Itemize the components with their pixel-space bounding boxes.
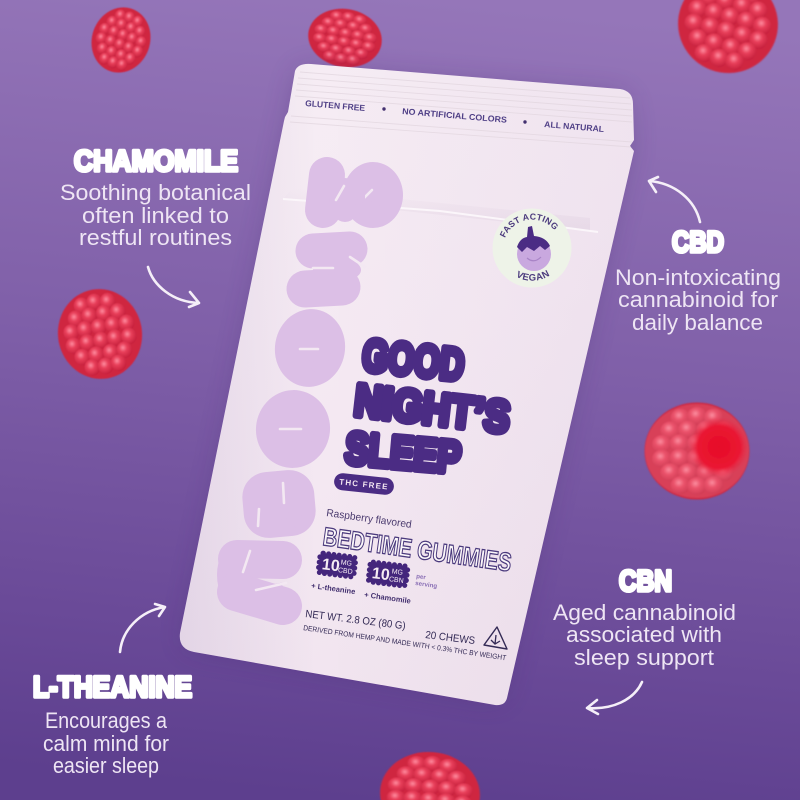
Chamomile: + Chamomile xyxy=(364,590,411,606)
dose badge: CBD: 10 xyxy=(321,556,341,575)
letter o: o xyxy=(281,426,334,461)
icon: raspberry xyxy=(517,226,551,271)
callout: l-theanine xyxy=(33,671,192,778)
letter z xyxy=(240,468,318,540)
callout: cbd: daily balance xyxy=(632,310,763,335)
top band claims: GLUTEN FREE xyxy=(305,98,366,113)
letter y: y xyxy=(246,576,299,609)
dose badge: CBN xyxy=(368,562,408,586)
letter y xyxy=(217,543,299,609)
callout: l-theanine: easier sleep xyxy=(53,753,159,778)
letter S xyxy=(323,162,403,228)
callout: chamomile: often linked to xyxy=(82,203,229,228)
heading: good night's sleep: GOOD xyxy=(360,329,467,391)
pill: thc free xyxy=(333,472,395,496)
callout: chamomile: CHAMOMILE xyxy=(74,145,238,178)
heading: good night's sleep: NIGHT’S xyxy=(352,374,513,443)
callout: cbd: CBD xyxy=(672,226,724,259)
crimped top band xyxy=(290,72,632,147)
callout: chamomile xyxy=(60,145,251,250)
product name: BEDTIME GUMMIES xyxy=(321,521,513,577)
letter o xyxy=(269,304,351,392)
pouch body xyxy=(180,64,634,705)
callout: l-theanine: Encourages a xyxy=(45,708,167,733)
dose badge: CBN: MG xyxy=(391,568,403,577)
Snoozy logo xyxy=(217,162,403,609)
pouch shadow xyxy=(185,70,630,700)
badge: fast acting vegan: VEGAN xyxy=(518,270,550,281)
badge: fast acting vegan xyxy=(492,208,572,288)
raspberry: top left xyxy=(82,0,160,81)
dose badge: CBN: 10 xyxy=(371,565,391,584)
top band claims: ALL NATURAL xyxy=(544,119,604,134)
net weight: NET WT. 2.8 OZ (80 G) xyxy=(305,608,406,632)
callout: cbn: sleep support xyxy=(574,645,715,670)
top band claims: NO ARTIFICIAL COLORS xyxy=(402,106,508,125)
raspberry: right with hollow xyxy=(644,402,750,500)
pouch xyxy=(180,64,634,706)
derivation note: DERIVED FROM HEMP AND MADE WITH < 0.3% THC BY WEIGHT xyxy=(303,623,507,662)
callout: cbn: Aged cannabinoid xyxy=(553,600,736,625)
callout: cbn: CBN xyxy=(619,565,672,598)
dose badge: CBN: CBN xyxy=(389,576,404,585)
callout: l-theanine: L-THEANINE xyxy=(33,671,192,704)
letter o: o xyxy=(298,345,351,380)
callout: cbn: associated with xyxy=(566,622,722,647)
arrow: cbn xyxy=(587,682,642,714)
dose badge: CBD xyxy=(318,553,356,577)
badge: fast acting vegan: FAST ACTING xyxy=(500,214,558,238)
per serving: per xyxy=(416,573,426,581)
dose badge: CBD: CBD xyxy=(338,567,353,576)
callout: cbd xyxy=(615,226,781,335)
flavor: Raspberry flavored xyxy=(326,507,413,531)
dose badge: CBD: MG xyxy=(340,559,352,568)
raspberry: top right xyxy=(667,0,789,84)
top band claims xyxy=(305,98,604,134)
zipper fold xyxy=(283,188,598,232)
arrow: cbd xyxy=(649,177,700,222)
callout: chamomile: restful routines xyxy=(79,225,232,250)
heading: good night's sleep xyxy=(343,329,513,483)
letter o xyxy=(250,384,336,474)
callout: cbn xyxy=(553,565,736,670)
L-theanine: + L-theanine xyxy=(311,581,356,596)
arrow: l-theanine xyxy=(120,604,165,652)
raspberry: bottom xyxy=(377,748,483,800)
per serving: serving xyxy=(415,580,438,590)
callout: cbd: cannabinoid for xyxy=(618,287,779,312)
raspberry: left xyxy=(51,282,149,386)
letter z: z xyxy=(266,503,318,534)
callout: l-theanine: calm mind for xyxy=(43,731,169,756)
heading: good night's sleep: SLEEP xyxy=(343,422,463,483)
letter n: n xyxy=(315,267,368,302)
icon: warning triangle xyxy=(484,627,507,649)
letter n xyxy=(305,249,368,302)
callout: cbd: Non-intoxicating xyxy=(615,265,781,290)
pill: thc free: THC FREE xyxy=(339,477,389,492)
callout: chamomile: Soothing botanical xyxy=(60,180,251,205)
arrow: chamomile xyxy=(148,267,199,307)
raspberry: top centre xyxy=(304,3,386,73)
letter S: S xyxy=(343,191,396,228)
chew count: 20 CHEWS xyxy=(425,629,476,647)
